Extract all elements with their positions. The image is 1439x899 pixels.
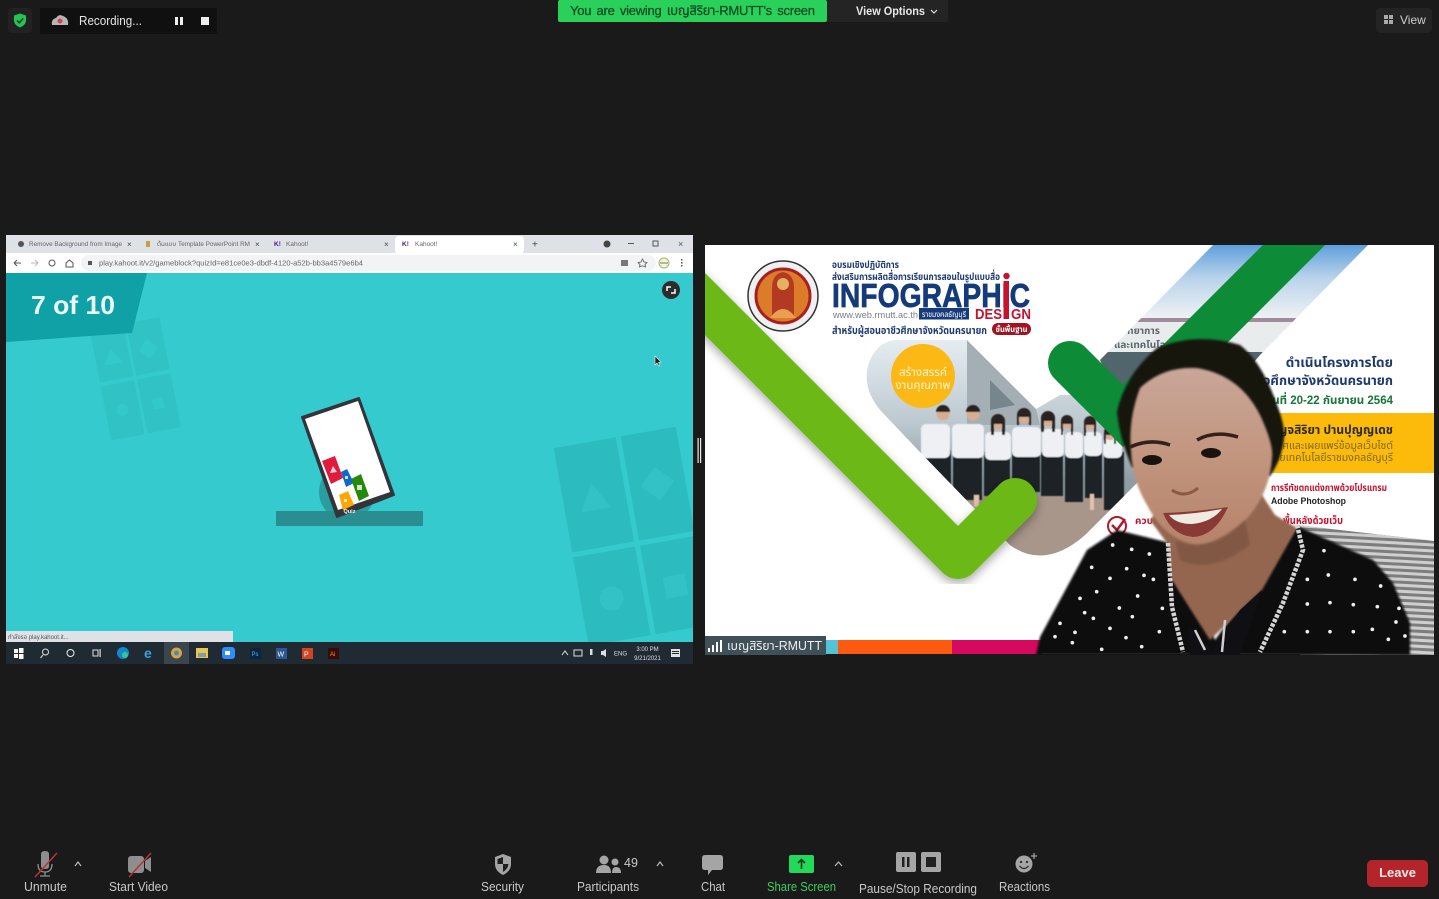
decorative answer cards right [554, 427, 693, 642]
decorative answer cards left [90, 317, 181, 441]
browser address bar [6, 253, 693, 273]
poster title block: อบรมเชิงปฏิบัติการ [832, 259, 899, 271]
neck [1150, 495, 1297, 640]
poster title block: ราชมงคลธัญบุรี [922, 309, 966, 319]
browser tab bar [6, 235, 693, 254]
footer colour strip [826, 640, 1300, 655]
course topics list: การรีทัชตกแต่งภาพด้วยโปรแกรม [1271, 482, 1387, 494]
viewing banner: You are viewing เบญสิริยา-RMUTT's screen [570, 3, 815, 18]
toolbar: participants button: Participants [577, 879, 639, 894]
view button: View [1400, 13, 1426, 27]
dark green check mark [1070, 219, 1320, 416]
browser tab bar: × [513, 240, 518, 249]
diagonal sky and building photo strip: และเทคโนโลยี [1114, 339, 1172, 351]
browser tab bar: × [127, 240, 132, 249]
course topics list: ควบคุม [1135, 516, 1166, 527]
poster title block: ขั้นพื้นฐาน [996, 324, 1028, 334]
kahoot teal stage [6, 273, 693, 642]
browser tab bar: × [384, 240, 389, 249]
layout splitter handle [698, 438, 701, 463]
toolbar: chat button [701, 855, 725, 894]
browser tab bar: Remove Background from Image [29, 241, 122, 248]
windows taskbar: P [304, 652, 309, 658]
smile [1163, 507, 1228, 537]
poster title block: สำหรับผู้สอนอาชีวศึกษาจังหวัดนครนายก [832, 324, 987, 337]
toolbar: unmute button: Unmute [24, 879, 67, 894]
browser tab bar: Kahoot! [415, 241, 438, 248]
recording indicator bar [40, 8, 217, 34]
light green check mark [690, 289, 1015, 557]
browser status bubble: กำลังรอ play.kahoot.it... [8, 634, 69, 641]
quiz loading illustration [276, 398, 423, 526]
yellow circle badge [891, 344, 955, 408]
browser status bubble [6, 631, 233, 642]
toolbar: participants button [577, 856, 663, 894]
browser tab bar: × [255, 240, 260, 249]
mouse cursor [655, 356, 661, 366]
browser tab bar: K! [274, 241, 281, 248]
eyebrows [1130, 434, 1238, 447]
view options menu [827, 0, 948, 22]
poster title block: GN [1011, 307, 1031, 323]
toolbar: start video button: Start Video [109, 879, 168, 894]
browser tab bar: ต้นแบบ Template PowerPoint RM [157, 240, 250, 248]
striped chair behind presenter [1298, 525, 1434, 655]
black blouse [1036, 526, 1410, 655]
participant name tag [705, 636, 826, 655]
viewing banner [558, 0, 827, 22]
panel: webcam video with virtual background poster [705, 245, 1434, 655]
windows taskbar: ENG [614, 652, 627, 658]
blouse dots [1055, 545, 1405, 649]
windows taskbar: Ai [330, 652, 335, 658]
yellow speaker box: นักสารสนเทศและเผยแพร่ข้อมูลเว็บไซต์ [1232, 439, 1393, 452]
toolbar: security button: Security [481, 879, 524, 894]
recording indicator bar: Recording... [79, 13, 142, 28]
toolbar: share screen button [767, 855, 842, 894]
progress ribbon: 7 of 10 [31, 290, 115, 320]
institute logo seal [748, 261, 818, 331]
fullscreen button [662, 281, 680, 299]
hair [1117, 339, 1284, 476]
toolbar: share screen button: Share Screen [767, 879, 836, 894]
panel: shared screen browser window [6, 235, 711, 664]
toolbar: participants button: 49 [624, 856, 638, 870]
poster title block: DES [975, 307, 1002, 323]
toolbar: leave button [1367, 860, 1428, 887]
organiser text block: วิทยาลัยอาชีวศึกษาจังหวัดนครนายก [1198, 373, 1393, 388]
course topics list [1108, 482, 1387, 535]
yellow circle badge: สร้างสรรค์ [899, 365, 947, 379]
toolbar: leave button: Leave [1379, 865, 1416, 880]
face [1130, 368, 1272, 545]
poster white background [705, 245, 1434, 655]
nose [1172, 488, 1198, 494]
organiser text block: วันที่ 20-22 กันยายน 2564 [1266, 392, 1394, 407]
yellow speaker box [1270, 413, 1434, 473]
poster title block: ส่งเสริมการผลิตสื่อการเรียนการสอนในรูปแบบสื่อ [832, 269, 1000, 283]
course topics list: พื้นหลังด้วยเว็บ [1283, 513, 1343, 527]
poster title block: www.web.rmutt.ac.th [832, 310, 918, 321]
view options menu: View Options [856, 6, 925, 18]
windows taskbar: 9/21/2021 [634, 656, 662, 662]
browser address bar: play.kahoot.it/v2/gameblock?quizId=e81ce0e3-dbdf-4120-a52b-bb3a4579e6b4 [99, 260, 363, 268]
presenter figure [1036, 339, 1410, 655]
poster title block: INFOGRAPHIC [832, 277, 1030, 314]
chin shadow [1175, 520, 1250, 565]
beaded collar [1168, 525, 1303, 652]
participant name tag: เบญสิริยา-RMUTT [727, 639, 822, 653]
toolbar: security button [481, 854, 524, 894]
yellow speaker box: เบญจสิริยา ปานปุญญเดช [1264, 423, 1393, 437]
progress ribbon [6, 273, 147, 342]
poster title block [832, 259, 1031, 337]
quiz loading illustration: Quiz [344, 509, 356, 515]
windows taskbar: e [144, 645, 152, 661]
toolbar: unmute button [24, 851, 81, 894]
organiser text block: ดำเนินโครงการโดย [1286, 355, 1393, 370]
course topics list: Adobe Photoshop [1271, 496, 1346, 507]
windows taskbar [6, 642, 693, 664]
browser tab bar: Kahoot! [286, 241, 309, 248]
students group photo [866, 340, 1138, 556]
student figures [921, 405, 1124, 510]
security shield badge [8, 8, 32, 33]
windows taskbar: 3:00 PM [636, 647, 659, 653]
blouse inner v [1188, 590, 1262, 655]
browser tab bar: × [678, 239, 683, 249]
toolbar: reactions button: Reactions [999, 879, 1050, 894]
toolbar: chat button: Chat [701, 879, 725, 894]
view button [1376, 8, 1432, 33]
organiser text block [1262, 356, 1393, 404]
toolbar: start video button [109, 853, 168, 894]
windows taskbar: Ps [252, 652, 259, 658]
eyes [1142, 448, 1221, 465]
windows taskbar: W [278, 652, 284, 658]
toolbar: pause stop recording button: Pause/Stop Recording [859, 881, 977, 896]
toolbar: reactions button [999, 853, 1050, 894]
yellow circle badge: งานคุณภาพ [895, 380, 951, 392]
diagonal sky and building photo strip [1100, 245, 1368, 385]
browser tab bar: K! [402, 241, 409, 248]
browser tab bar: + [532, 240, 538, 250]
yellow speaker box: มหาวิทยาลัยเทคโนโลยีราชมงคลธัญบุรี [1234, 452, 1394, 464]
diagonal sky and building photo strip: วิทยาการ [1121, 326, 1160, 337]
toolbar: pause stop recording button [859, 852, 977, 896]
